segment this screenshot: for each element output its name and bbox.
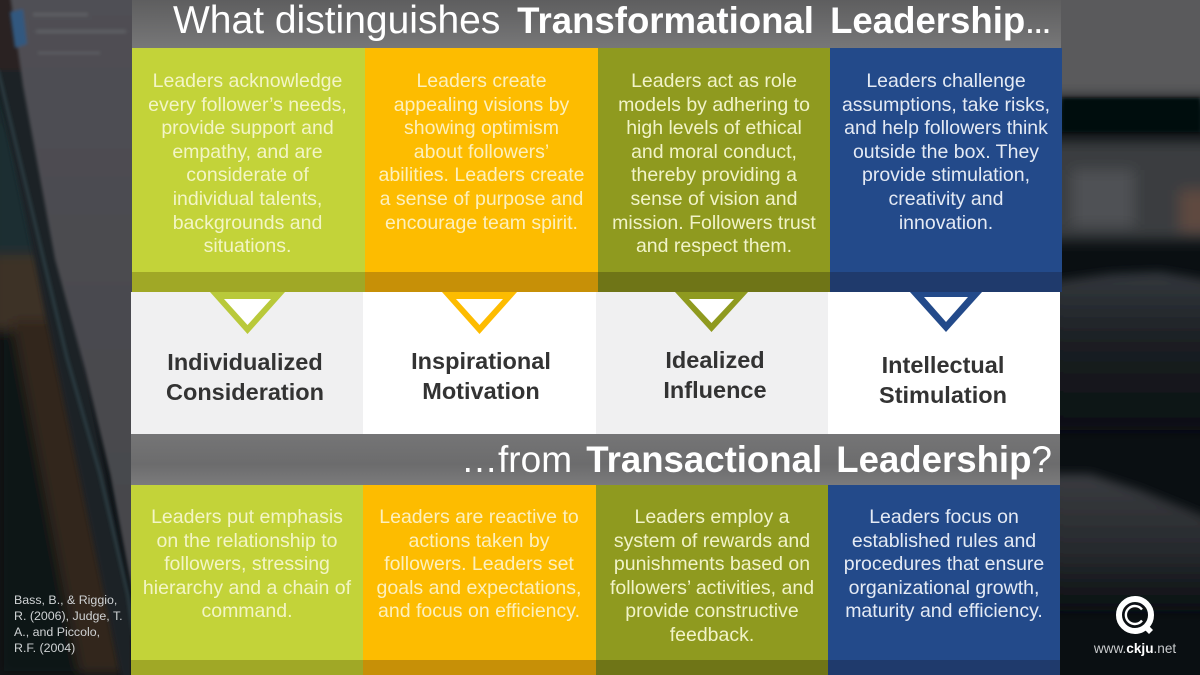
text: transactional relationship: hierarchy and a chain of [143,577,351,599]
icon: blue triangle [910,292,982,332]
text: transactional reactive [377,506,581,622]
citation: R.F. (2004) [14,641,75,655]
citation: R. (2006), Judge, T. [14,609,123,623]
text: idealized description: thereby providing a [631,164,797,186]
text: transactional reactive: and focus on efficiency. [378,600,580,622]
text: transactional rules: procedures that ensure [844,553,1044,575]
text: intellectual description: assumptions, take risks, [842,94,1050,116]
heading: inspirational motivation [411,348,551,404]
panel: transactional reactive [363,485,596,675]
text: transactional reactive: actions taken by [409,530,549,552]
heading: inspirational motivation: Inspirational [411,348,551,374]
heading: intellectual stimulation: Stimulation [879,382,1007,408]
text: transactional relationship: followers, stressing [164,553,330,575]
heading: intellectual stimulation: Intellectual [882,352,1004,378]
text: idealized description: and moral conduct, [631,141,797,163]
strip [830,272,1062,292]
text: inspirational description: showing optimism [404,117,559,139]
text: inspirational description: appealing visions by [394,94,569,116]
text: individualized description: situations. [204,235,291,257]
text: intellectual description: creativity and [889,188,1003,210]
text: transactional relationship: Leaders put emphasis [151,506,343,528]
strip [132,272,365,292]
heading: intellectual stimulation [879,352,1007,408]
text: intellectual description: innovation. [899,212,993,234]
panel: idealized label [596,292,828,434]
strip [596,660,828,675]
text: intellectual description: Leaders challenge [866,70,1026,92]
citation: A., and Piccolo, [14,625,100,639]
heading band: transformational [132,0,1061,48]
text: transactional rules: established rules and [852,530,1036,552]
text: intellectual description: and help followers think [844,117,1048,139]
text: idealized description: high levels of ethical [626,117,802,139]
panel: idealized description [598,48,830,292]
text: individualized description [148,70,347,257]
text: idealized description: models by adhering to [618,94,810,116]
text: inspirational description: a sense of purpose and [380,188,583,210]
citation: Bass, B., & Riggio, [14,593,117,607]
text: transactional relationship: command. [201,600,293,622]
text: inspirational description [379,70,584,234]
text: idealized description: sense of vision and [631,188,797,210]
text: transactional rewards: feedback. [670,624,754,646]
text: individualized description: Leaders acknowledge [153,70,342,92]
text: individualized description: backgrounds and [173,212,322,234]
text: idealized description: mission. Followers trust [612,212,816,234]
text: inspirational description: about followers’ [414,141,549,163]
heading: individualized consideration [166,349,324,405]
text: inspirational description: abilities. Leaders create [379,164,584,186]
panel: individualized label [131,292,363,434]
text: individualized description: empathy, and are [172,141,323,163]
strip [363,660,596,675]
icon: yellow triangle [442,292,517,334]
text: intellectual description [842,70,1050,234]
heading: individualized consideration: Individualized [167,349,323,375]
citation [14,593,123,655]
heading: idealized influence: Idealized [665,347,765,373]
heading band: transactional [131,434,1060,485]
strip [365,272,598,292]
text: transactional reactive: Leaders are reactive to [379,506,579,528]
heading: idealized influence [663,347,767,403]
text: inspirational description: Leaders create [416,70,547,92]
text: individualized description: individual talents, [173,188,322,210]
text: transactional rules: organizational growth, [849,577,1039,599]
icon: olive triangle [675,292,748,332]
text: transactional rewards: followers’ activities, and [610,577,814,599]
panel: transactional rules [828,485,1060,675]
logo url: www.ckju.net [1094,641,1176,656]
text: transactional relationship [143,506,352,622]
text: idealized description: Leaders act as role [631,70,797,92]
panel: inspirational label [363,292,596,434]
text: transactional rewards: Leaders employ a [634,506,790,528]
panel: transactional rewards [596,485,828,675]
text: intellectual description: outside the box. They [853,141,1039,163]
strip [828,660,1060,675]
text: transactional rules: Leaders focus on [869,506,1019,528]
text: individualized description: provide support and [161,117,334,139]
text: inspirational description: encourage team spirit. [385,212,578,234]
text: idealized description [612,70,816,257]
text: transactional rules [844,506,1044,622]
heading: inspirational motivation: Motivation [422,378,540,404]
title: transactional: …from Transactional Leadership? [461,439,1052,480]
icon: ckju logo [1116,596,1154,634]
panel: transactional relationship [131,485,363,675]
text: transactional rewards: punishments based on [614,553,810,575]
text: individualized description: considerate of [186,164,309,186]
text: transactional rewards: provide constructive [625,600,799,622]
text: transactional relationship: on the relationship to [156,530,338,552]
text: idealized description: and respect them. [636,235,792,257]
panel: intellectual label [828,292,1060,434]
text: transactional reactive: followers. Leaders set [384,553,574,575]
text: individualized description: every follower’s needs, [148,94,347,116]
text: intellectual description: provide stimulation, [862,164,1030,186]
text: transactional rewards [610,506,814,646]
panel: inspirational description [365,48,598,292]
panel: individualized description [132,48,365,292]
text: transactional rewards: system of rewards and [614,530,810,552]
icon: green triangle [210,292,285,334]
text: transactional reactive: goals and expectations, [377,577,581,599]
text: transactional rules: maturity and efficiency. [845,600,1043,622]
heading: idealized influence: Influence [663,377,767,403]
strip [598,272,830,292]
heading: individualized consideration: Consideration [166,379,324,405]
panel: intellectual description [830,48,1062,292]
strip [131,660,363,675]
title: transformational: What distinguishes Transformational Leadership… [173,0,1051,42]
